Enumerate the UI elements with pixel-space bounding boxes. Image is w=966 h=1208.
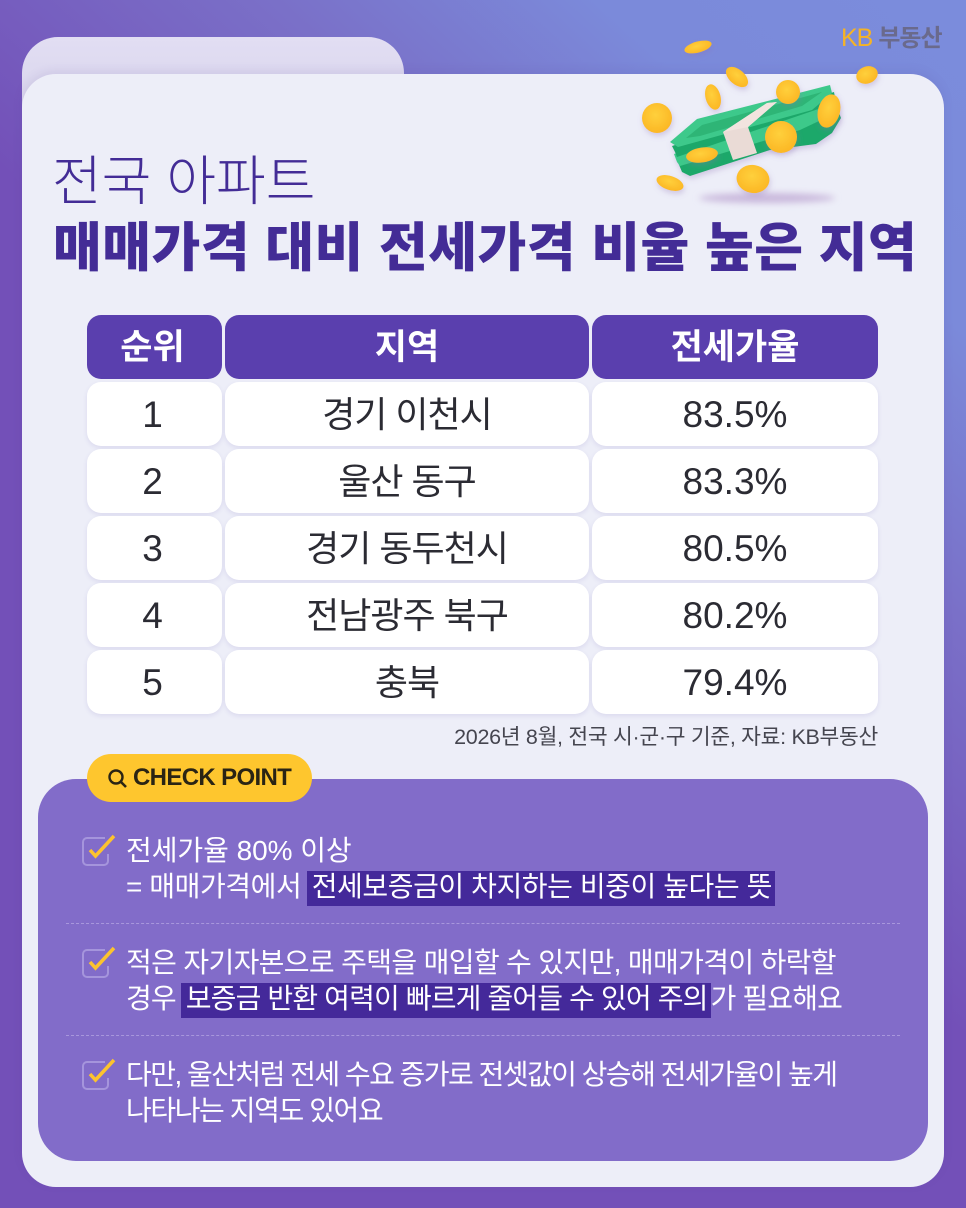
item 2 text: 경우 보증금 반환 여력이 빠르게 줄어들 수 있어 주의가 필요해요 xyxy=(126,983,842,1014)
row 5: 충북 xyxy=(375,662,439,702)
source note: 2026년 8월, 전국 시·군·구 기준, 자료: KB부동산 xyxy=(454,725,878,749)
icon: magnifier xyxy=(108,769,127,788)
row 2: 2 xyxy=(142,460,163,502)
row 2: 울산 동구 xyxy=(338,460,476,502)
item 1 text xyxy=(126,835,775,906)
checklist item 3 xyxy=(82,1058,836,1126)
row 1 xyxy=(86,382,878,448)
panel: check point xyxy=(38,779,928,1161)
row 4: 4 xyxy=(142,594,163,636)
badge: CHECK POINT xyxy=(87,754,312,802)
back tab xyxy=(22,37,404,127)
row 4: 80.2% xyxy=(683,594,787,636)
checklist item 1 xyxy=(82,834,775,906)
row 2 xyxy=(86,449,878,516)
item 3 text: 다만, 울산처럼 전세 수요 증가로 전셋값이 상승해 전세가율이 높게 xyxy=(126,1059,836,1090)
row 4: 전남광주 북구 xyxy=(306,594,508,636)
checklist item 2 xyxy=(82,946,842,1018)
item 2 text: 적은 자기자본으로 주택을 매입할 수 있지만, 매매가격이 하락할 xyxy=(126,947,836,978)
row 4 xyxy=(86,583,878,650)
title line 1: 전국 아파트 xyxy=(52,152,315,212)
row 3 xyxy=(86,516,878,582)
item 1 text: 전세가율 80% 이상 xyxy=(126,835,352,866)
table header: 순위 xyxy=(120,328,185,366)
row 5: 5 xyxy=(142,662,163,702)
item 3 text xyxy=(126,1059,836,1126)
table header xyxy=(87,315,878,379)
item 3 text: 나타나는 지역도 있어요 xyxy=(126,1095,382,1126)
row 1: 경기 이천시 xyxy=(322,394,492,434)
item 1 text: = 매매가격에서 전세보증금이 차지하는 비중이 높다는 뜻 xyxy=(126,871,772,902)
row 3: 경기 동두천시 xyxy=(306,528,508,568)
icon: check xyxy=(82,834,116,866)
row 3: 3 xyxy=(142,528,163,568)
title line 2: 매매가격 대비 전세가격 비율 높은 지역 xyxy=(53,219,917,278)
row 5 xyxy=(86,650,878,716)
row 2: 83.3% xyxy=(683,460,787,502)
row 3: 80.5% xyxy=(683,528,787,568)
table xyxy=(86,315,878,716)
icon: check xyxy=(82,1058,116,1090)
row 1: 1 xyxy=(142,394,163,434)
row 1: 83.5% xyxy=(683,394,787,434)
icon: check xyxy=(82,946,116,978)
logo: KB부동산: KB 부동산 xyxy=(841,24,942,52)
item 2 text xyxy=(126,947,842,1018)
table header: 전세가율 xyxy=(671,328,799,366)
row 5: 79.4% xyxy=(683,662,787,702)
table header: 지역 xyxy=(375,328,439,366)
badge label: CHECK POINT xyxy=(133,764,291,791)
illustration: money and coins xyxy=(641,40,880,206)
